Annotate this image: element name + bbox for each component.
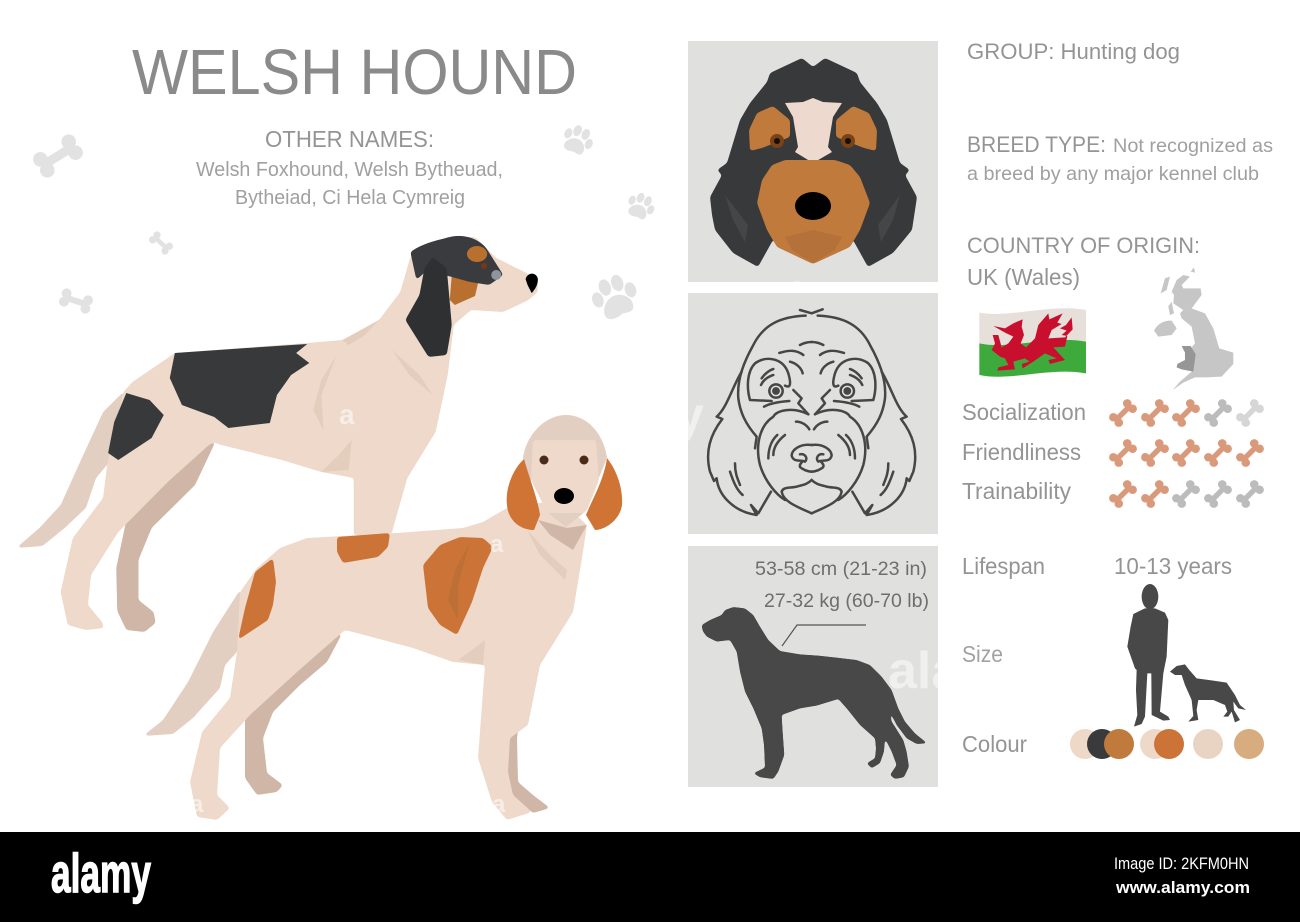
Great Britain bbox=[1172, 275, 1233, 390]
Hebrides and islands bbox=[1161, 267, 1195, 315]
nose bbox=[526, 274, 538, 293]
watermark a dog 1: a bbox=[339, 399, 355, 430]
other names heading: OTHER NAMES: bbox=[265, 126, 434, 152]
red dragon bbox=[992, 313, 1073, 371]
neck shadow bbox=[538, 520, 587, 550]
tail bbox=[143, 590, 250, 736]
panel: line art head bbox=[688, 293, 938, 534]
watermark a front foot: a bbox=[492, 791, 506, 818]
dark head bbox=[410, 236, 503, 285]
friendliness bones bbox=[1107, 437, 1266, 469]
rating: friendliness bbox=[962, 437, 1266, 469]
icon: paw middle bbox=[623, 189, 659, 223]
orange shoulder patch bbox=[423, 537, 493, 635]
panel: colour head portrait bbox=[688, 41, 938, 282]
breed type value line 2: a breed by any major kennel club bbox=[967, 163, 1259, 185]
icon: medium bone bbox=[58, 287, 94, 315]
footer logo: alamy bbox=[51, 842, 151, 904]
size label: Size bbox=[962, 641, 1003, 667]
human head bbox=[1142, 584, 1158, 609]
ear highlights bbox=[725, 195, 900, 242]
dog silhouette small bbox=[1170, 664, 1246, 722]
country heading: COUNTRY OF ORIGIN: bbox=[967, 233, 1200, 258]
Wales highlighted bbox=[1177, 346, 1196, 372]
black rump patch bbox=[108, 393, 164, 460]
flag white band bbox=[979, 308, 1086, 345]
colour swatches bbox=[962, 729, 1264, 759]
flag green band bbox=[979, 340, 1086, 377]
left brow bbox=[749, 106, 790, 151]
icon: small bone bbox=[147, 230, 175, 256]
other names block bbox=[196, 126, 503, 209]
human body bbox=[1127, 608, 1170, 727]
far hind leg bbox=[116, 440, 216, 632]
far front leg bbox=[505, 665, 550, 813]
right ear bbox=[586, 458, 622, 530]
size comparison bbox=[962, 584, 1246, 727]
country of origin bbox=[967, 233, 1200, 290]
height pointer bbox=[782, 625, 866, 646]
nose bbox=[554, 488, 574, 504]
black saddle patch bbox=[170, 344, 309, 428]
swatch set 2 bbox=[1140, 729, 1184, 759]
watermark ala panel 3: ala bbox=[888, 642, 961, 700]
fur shading strokes bbox=[313, 320, 433, 472]
dog: black and cream hound bbox=[16, 236, 538, 632]
eyes bbox=[540, 456, 588, 464]
icon: paw top bbox=[558, 121, 598, 159]
dog: orange and cream hound bbox=[143, 415, 622, 820]
icon: UK map bbox=[1154, 267, 1233, 390]
lifespan label: Lifespan bbox=[962, 553, 1045, 579]
watermark a rear foot: a bbox=[190, 791, 204, 818]
watermarks bbox=[190, 275, 961, 818]
shoulder stripe bbox=[448, 542, 470, 620]
rating: trainability bbox=[962, 478, 1266, 510]
Ireland bbox=[1154, 321, 1177, 337]
socialization bones bbox=[1107, 397, 1266, 429]
footer url: www.alamy.com bbox=[1115, 878, 1250, 897]
chin bbox=[548, 513, 583, 527]
title: WELSH HOUND bbox=[132, 36, 577, 108]
image id: Image ID: 2KFM0HN bbox=[1114, 855, 1249, 873]
muzzle bbox=[757, 160, 870, 264]
body bbox=[190, 500, 587, 820]
body bbox=[61, 237, 538, 630]
decorative bones and paws bbox=[30, 121, 659, 324]
lifespan value: 10-13 years bbox=[1114, 553, 1232, 579]
far hind leg bbox=[245, 632, 343, 795]
watermark y panel 2: y bbox=[676, 387, 704, 443]
swatch tan bbox=[1234, 729, 1264, 759]
trainability label: Trainability bbox=[962, 478, 1071, 504]
left ear bbox=[507, 459, 540, 530]
panel: size silhouette bbox=[688, 546, 938, 787]
face bbox=[531, 440, 599, 528]
nose bbox=[795, 192, 831, 220]
footer bar bbox=[0, 832, 1300, 922]
other names line 1: Welsh Foxhound, Welsh Bytheuad, bbox=[196, 159, 503, 181]
trainability bones bbox=[1107, 478, 1266, 510]
icon: large bone bbox=[30, 132, 86, 180]
group info: GROUP: Hunting dog bbox=[967, 39, 1180, 64]
swatch cream bbox=[1193, 729, 1223, 759]
orange rump patch bbox=[238, 558, 276, 640]
orange back patch bbox=[337, 533, 390, 563]
tan ruff bbox=[450, 275, 478, 305]
tan brow bbox=[467, 246, 487, 262]
head outline bbox=[708, 309, 915, 515]
lifespan bbox=[962, 553, 1232, 579]
other names line 2: Bytheiad, Ci Hela Cymreig bbox=[235, 187, 465, 209]
far front leg bbox=[369, 478, 407, 535]
human and dog silhouettes bbox=[1127, 584, 1246, 727]
country value: UK (Wales) bbox=[967, 264, 1080, 290]
dark hair and ears bbox=[710, 58, 917, 267]
socialization label: Socialization bbox=[962, 399, 1086, 425]
watermark a top panel: a bbox=[791, 275, 803, 297]
right brow bbox=[836, 106, 877, 151]
ear bbox=[405, 257, 452, 357]
tail bbox=[16, 392, 131, 548]
eyes bbox=[770, 134, 855, 148]
breed type label: BREED TYPE: bbox=[967, 132, 1106, 157]
icon: Welsh flag bbox=[979, 308, 1086, 377]
grey muzzle spot bbox=[491, 270, 501, 280]
watermark a dog 2 shoulder: a bbox=[490, 531, 504, 558]
white blaze bbox=[785, 98, 842, 163]
colour label: Colour bbox=[962, 731, 1027, 757]
chest shading bbox=[458, 530, 567, 665]
breed type info bbox=[967, 132, 1273, 185]
head dome bbox=[523, 415, 607, 480]
breed type value line 1: Not recognized as bbox=[1113, 135, 1273, 157]
friendliness label: Friendliness bbox=[962, 439, 1081, 465]
swatch set 1 bbox=[1070, 729, 1134, 759]
chin shade bbox=[785, 230, 842, 263]
eye bbox=[481, 263, 487, 269]
height text: 53-58 cm (21-23 in) bbox=[755, 558, 927, 580]
icon: paw large bbox=[587, 270, 643, 324]
dog silhouette bbox=[702, 607, 927, 779]
rating: socialization bbox=[962, 397, 1266, 429]
weight text: 27-32 kg (60-70 lb) bbox=[764, 590, 929, 612]
